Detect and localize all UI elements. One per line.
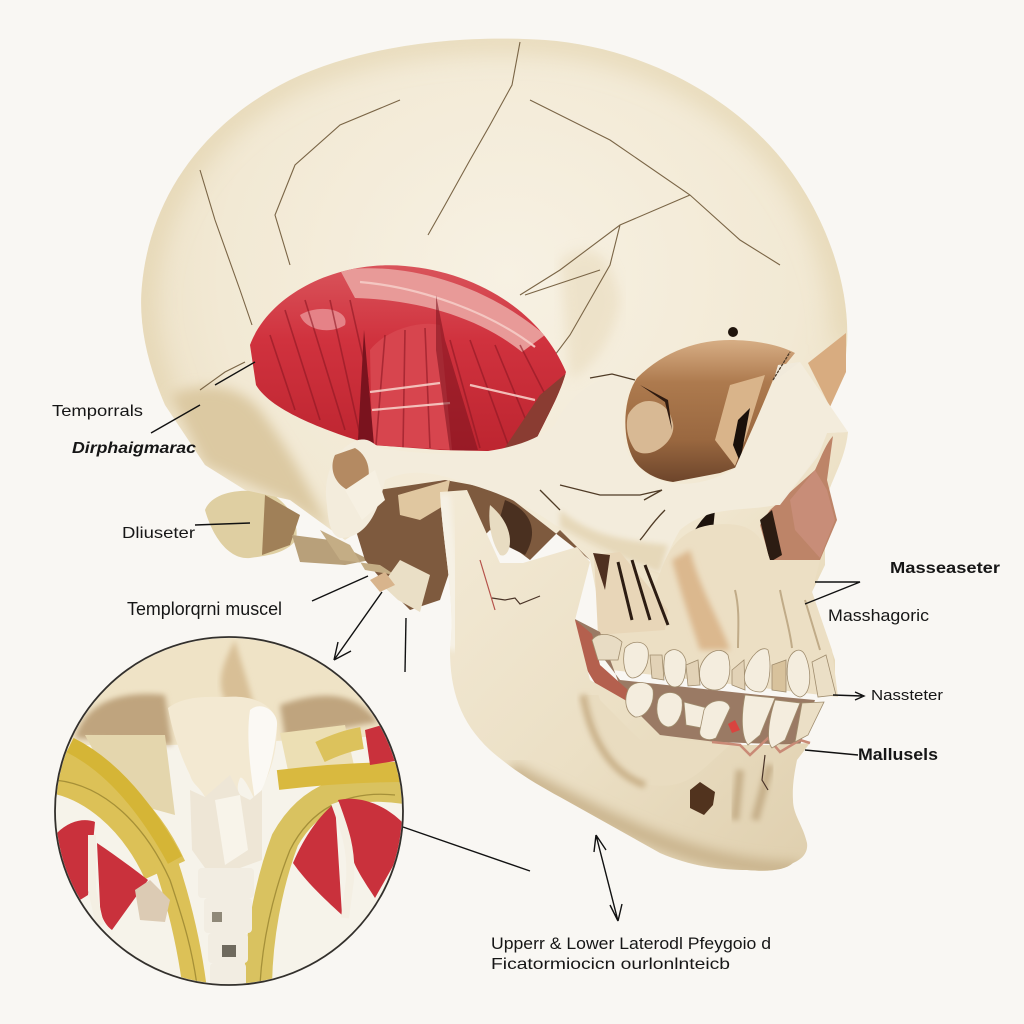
muscle fibres bbox=[270, 268, 570, 455]
zygomatic arch bbox=[326, 362, 848, 573]
inset central crease bbox=[221, 640, 255, 710]
inset yellow nerves bbox=[45, 738, 405, 990]
occipital bone growth behind skull bbox=[205, 491, 370, 565]
gum line bbox=[712, 738, 810, 755]
cranial sutures bbox=[200, 42, 780, 395]
nasal cavity bbox=[760, 436, 837, 560]
lower teeth bbox=[626, 682, 824, 748]
brow foramen bbox=[728, 327, 738, 337]
inset red muscles bbox=[57, 820, 95, 900]
inset shadow under bone bbox=[75, 694, 378, 745]
mandible shading bbox=[440, 495, 800, 870]
label: Dliuseter: Dliuseter bbox=[122, 525, 196, 542]
inset central white bone bbox=[168, 697, 277, 800]
mental foramen bbox=[690, 782, 715, 815]
mouth interior bbox=[573, 618, 815, 745]
caption: Upperr & Lower Laterodl Pfeygoio d bbox=[491, 934, 771, 953]
underside shadows bbox=[345, 480, 590, 610]
maxilla bbox=[593, 524, 838, 697]
inset left structures bbox=[85, 735, 175, 815]
orbit inner detail bbox=[627, 375, 765, 466]
inset upper bone bbox=[69, 638, 380, 745]
arch cracks bbox=[540, 374, 665, 540]
mandible bbox=[440, 490, 810, 871]
inset border bbox=[55, 637, 403, 985]
skull bbox=[141, 39, 848, 695]
caption: Ficatormiocicn ourlonlnteicb bbox=[491, 956, 730, 973]
far orbit side bbox=[808, 333, 846, 407]
teeth bbox=[592, 634, 836, 748]
orbit cavity bbox=[625, 340, 795, 482]
caption bbox=[491, 934, 771, 973]
leader lines and arrows bbox=[151, 362, 864, 921]
label: Temporrals: Temporrals bbox=[52, 403, 143, 420]
jaw suture bbox=[492, 596, 540, 604]
cranium rim shading bbox=[141, 39, 847, 530]
upper teeth bbox=[592, 634, 836, 697]
inset vertebrae bbox=[212, 908, 252, 984]
dark sinus under arch bbox=[682, 510, 715, 547]
label: Templorqrni muscel: Templorqrni muscel bbox=[127, 599, 282, 619]
nasal bone bbox=[760, 362, 848, 505]
label: Dirphaigmarac: Dirphaigmarac bbox=[72, 440, 196, 457]
cranium bbox=[141, 39, 848, 695]
label: Nassteter: Nassteter bbox=[871, 687, 943, 704]
inset circle bbox=[45, 630, 410, 990]
label: Mallusels: Mallusels bbox=[858, 745, 938, 764]
temporalis muscle bbox=[250, 265, 570, 455]
label: Masshagoric: Masshagoric bbox=[828, 606, 930, 625]
label: Masseaseter: Masseaseter bbox=[890, 560, 1000, 577]
